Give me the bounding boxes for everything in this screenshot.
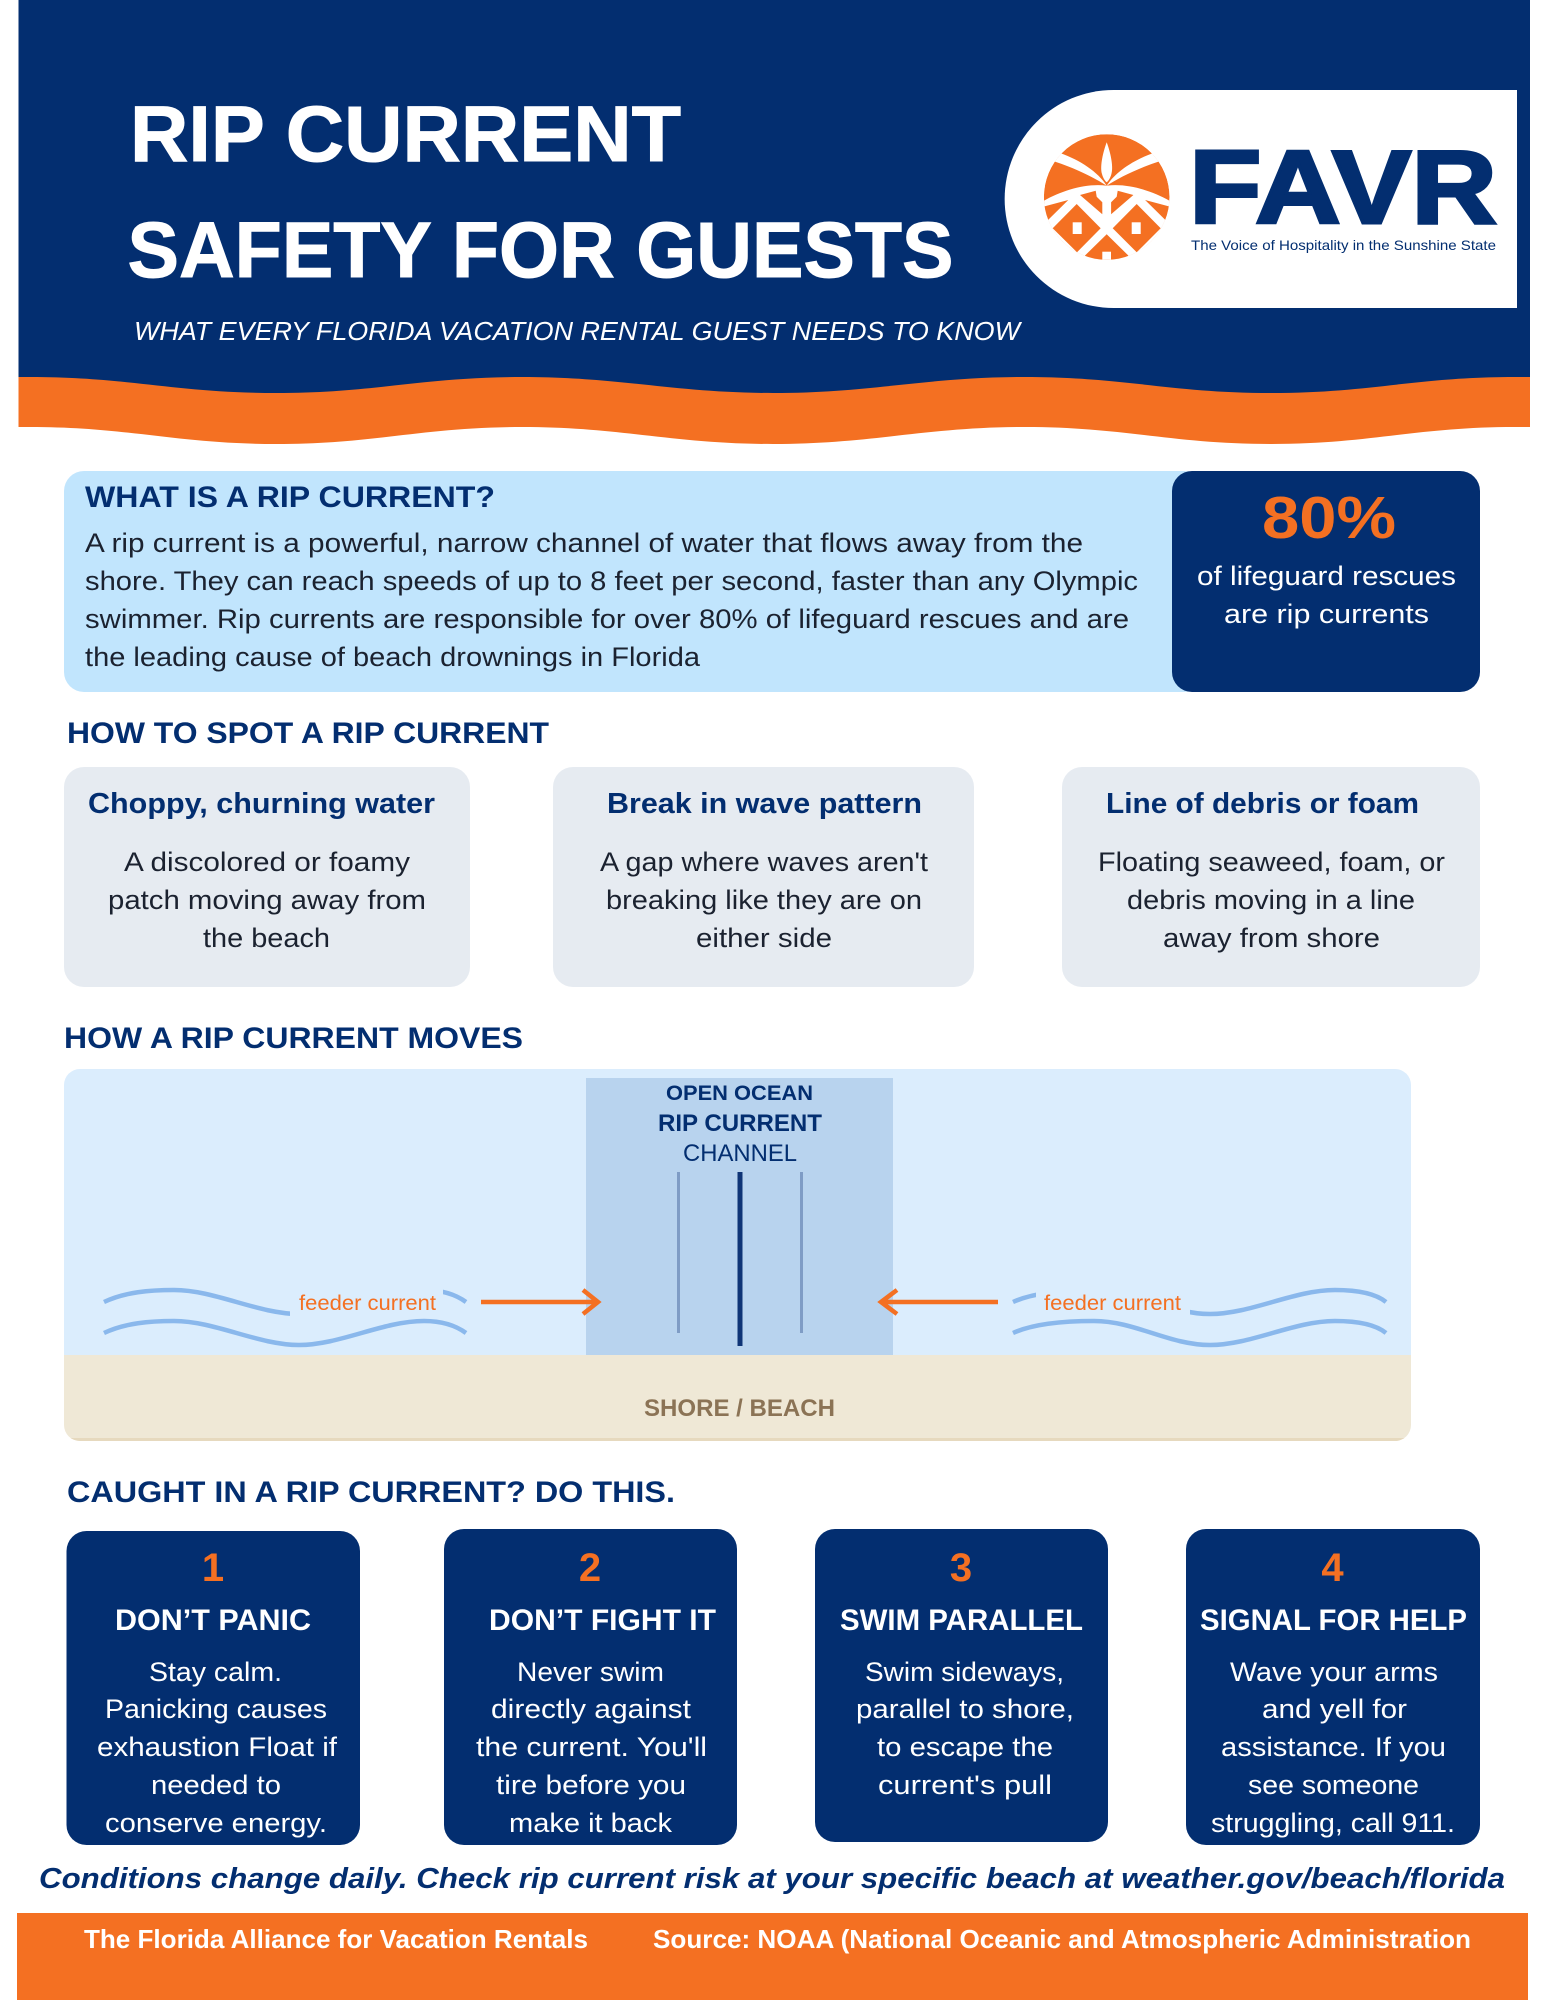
footer bar [17, 1913, 1528, 2000]
channel flow lines [677, 1172, 803, 1346]
heading: how a rip current moves: HOW A RIP CURRENT MOVES [64, 1022, 523, 1055]
stat callout: 80% [1172, 471, 1480, 692]
card: choppy water: Choppy, churning water [88, 788, 435, 820]
step 3: swim parallel: 3 [950, 1546, 972, 1590]
card: break in wave pattern [553, 767, 974, 987]
subtitle: WHAT EVERY FLORIDA VACATION RENTAL GUEST NEEDS TO KNOW [134, 316, 1023, 346]
step 2: don't fight it: 2 [579, 1546, 601, 1590]
card: line of debris [1062, 767, 1480, 987]
step 4: signal for help: assistance. If you [1221, 1732, 1446, 1762]
step 2: don't fight it: the current. You'll [476, 1732, 707, 1762]
step 4: signal for help [1186, 1529, 1480, 1845]
card: break in wave pattern: either side [696, 923, 832, 953]
definition text [85, 528, 1138, 672]
definition text: swimmer. Rip currents are responsible for over 80% of lifeguard rescues and are [85, 604, 1129, 634]
step 3: swim parallel: parallel to shore, [856, 1694, 1074, 1724]
shore label: SHORE / BEACH [644, 1395, 835, 1422]
step 4: signal for help: 4 [1321, 1546, 1344, 1590]
step 3: swim parallel: current's pull [878, 1770, 1052, 1800]
step 4: signal for help: Wave your arms [1230, 1657, 1438, 1687]
step 1: don't panic [66, 1531, 360, 1845]
card: line of debris: Floating seaweed, foam, or [1098, 847, 1445, 877]
card: line of debris: debris moving in a line [1127, 885, 1415, 915]
orange wave band [18, 377, 1530, 444]
step 1: don't panic: Stay calm. [149, 1657, 282, 1687]
diagram: rip current movement [64, 1069, 1411, 1441]
heading: how to spot: HOW TO SPOT A RIP CURRENT [67, 717, 549, 750]
conditions note: Conditions change daily. Check rip current risk at your specific beach at weather.gov/beach/florida [39, 1863, 1505, 1895]
step 4: signal for help: SIGNAL FOR HELP [1200, 1604, 1467, 1637]
title [128, 89, 954, 294]
step 1: don't panic: exhaustion Float if [97, 1732, 338, 1762]
panel: what is a rip current [64, 471, 1480, 692]
header banner [18, 0, 1530, 444]
footer bar: Source: NOAA (National Oceanic and Atmospheric Administration [653, 1924, 1471, 1954]
card: line of debris: Line of debris or foam [1106, 788, 1419, 820]
step 1: don't panic: DON’T PANIC [115, 1604, 311, 1637]
title: SAFETY FOR GUESTS [128, 205, 954, 294]
card: choppy water [64, 767, 470, 987]
title: RIP CURRENT [130, 89, 681, 178]
left feeder label: feeder current [299, 1292, 436, 1315]
right feeder label: feeder current [1044, 1292, 1181, 1315]
step 2: don't fight it [444, 1529, 737, 1845]
card: choppy water: the beach [203, 923, 330, 953]
stat callout: 80%: are rip currents [1224, 599, 1429, 629]
card: break in wave pattern: breaking like they are on [606, 885, 922, 915]
card: break in wave pattern: A gap where waves aren't [600, 847, 929, 877]
logo wordmark: The Voice of Hospitality in the Sunshine State [1191, 237, 1496, 253]
channel labels: OPEN OCEAN [666, 1082, 813, 1105]
channel labels [658, 1082, 822, 1167]
step 1: don't panic: Panicking causes [105, 1694, 327, 1724]
card: choppy water: patch moving away from [108, 885, 426, 915]
card: choppy water: A discolored or foamy [124, 847, 411, 877]
step 4: signal for help: and yell for [1262, 1694, 1407, 1724]
arrow: right feeder into channel [881, 1290, 998, 1314]
card: line of debris: away from shore [1163, 923, 1380, 953]
definition text: the leading cause of beach drownings in Florida [85, 642, 701, 672]
icon: FAVR palm and houses emblem [1044, 134, 1170, 260]
step 1: don't panic: conserve energy. [105, 1808, 327, 1838]
step 3: swim parallel: to escape the [877, 1732, 1053, 1762]
channel labels: RIP CURRENT [658, 1110, 822, 1137]
step 3: swim parallel [815, 1529, 1108, 1842]
stat callout: 80%: 80% [1262, 485, 1396, 551]
step 2: don't fight it: tire before you [496, 1770, 686, 1800]
step 3: swim parallel: Swim sideways, [865, 1657, 1064, 1687]
footer bar: The Florida Alliance for Vacation Rentals [84, 1924, 588, 1954]
right feeder waves [1013, 1290, 1386, 1345]
arrow: left feeder into channel [481, 1290, 598, 1314]
heading: WHAT IS A RIP CURRENT? [85, 481, 495, 514]
step 3: swim parallel: SWIM PARALLEL [840, 1604, 1083, 1637]
card: break in wave pattern: Break in wave pattern [607, 788, 922, 820]
step 1: don't panic: needed to [151, 1770, 281, 1800]
step 2: don't fight it: DON’T FIGHT IT [489, 1604, 716, 1637]
step 4: signal for help: see someone [1248, 1770, 1419, 1800]
logo panel [1005, 90, 1517, 308]
channel labels: CHANNEL [683, 1140, 797, 1167]
step 2: don't fight it: make it back [509, 1808, 673, 1838]
definition text: A rip current is a powerful, narrow channel of water that flows away from the [85, 528, 1083, 558]
heading: caught in a rip current: CAUGHT IN A RIP CURRENT? DO THIS. [67, 1476, 675, 1509]
step 4: signal for help: struggling, call 911. [1211, 1808, 1455, 1838]
step 2: don't fight it: Never swim [517, 1657, 664, 1687]
logo wordmark: FAVR [1189, 130, 1497, 246]
step 2: don't fight it: directly against [491, 1694, 692, 1724]
definition text: shore. They can reach speeds of up to 8 feet per second, faster than any Olympic [85, 566, 1138, 596]
step 1: don't panic: 1 [202, 1546, 224, 1590]
stat callout: 80%: of lifeguard rescues [1197, 561, 1456, 591]
left feeder waves [104, 1290, 466, 1345]
